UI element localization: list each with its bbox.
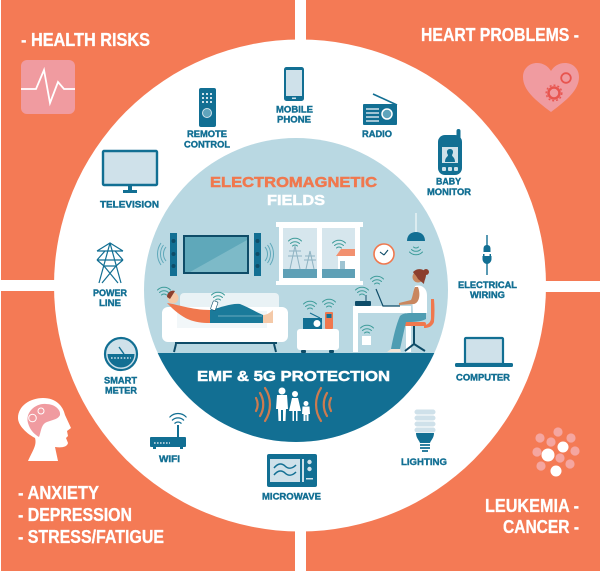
device: wifi router: WIFI	[159, 454, 180, 465]
title: electromagnetic fields	[210, 176, 377, 206]
device: electrical wiring plug: WIRING	[470, 290, 505, 301]
device: remote control: REMOTE	[187, 129, 227, 140]
panel: anxiety quadrant	[1, 291, 295, 571]
white device ring	[54, 40, 546, 532]
pendant lamp	[407, 213, 425, 255]
device: baby monitor	[427, 129, 471, 198]
device: microwave: MICROWAVE	[262, 492, 321, 502]
text: anxiety list: - DEPRESSION	[18, 504, 132, 525]
device: power line: LINE	[99, 298, 121, 309]
device: computer laptop: COMPUTER	[456, 372, 510, 384]
icon: family with signal waves	[256, 388, 331, 421]
device: microwave	[262, 454, 321, 502]
device: smart meter: METER	[105, 386, 137, 396]
device: mobile phone: PHONE	[277, 114, 311, 126]
panel: health risks quadrant	[1, 0, 295, 280]
seated woman on office chair	[387, 269, 434, 352]
device: radio	[362, 94, 397, 140]
device: electrical wiring plug	[458, 235, 517, 301]
text: leukemia and cancer: LEUKEMIA -	[485, 495, 579, 516]
device: radio: RADIO	[362, 129, 392, 140]
device: lighting bulb	[401, 412, 447, 468]
text: anxiety list: - STRESS/FATIGUE	[18, 526, 164, 547]
protection heading: EMF & 5G PROTECTION	[197, 368, 390, 385]
device: television	[100, 151, 159, 210]
text: leukemia and cancer: CANCER -	[503, 516, 579, 537]
text: leukemia and cancer	[485, 495, 579, 537]
device: lighting bulb: LIGHTING	[401, 457, 447, 468]
television with speakers	[157, 233, 274, 276]
heading: health risks: - HEALTH RISKS	[21, 29, 150, 50]
device: computer laptop	[455, 338, 513, 384]
icon: head with brain	[18, 398, 71, 461]
device: smart meter	[104, 338, 137, 396]
text: anxiety list	[18, 482, 164, 547]
device: wifi router	[150, 414, 186, 465]
device: power line: POWER	[93, 288, 127, 299]
device: baby monitor: BABY	[436, 176, 462, 188]
device: smart meter: SMART	[104, 376, 137, 386]
device: mobile phone	[276, 67, 313, 126]
icon: blood cells	[532, 427, 580, 476]
wall clock	[374, 244, 394, 264]
text: anxiety list: - ANXIETY	[18, 482, 100, 503]
icon: heartbeat pulse	[21, 60, 75, 114]
lying person with phone	[158, 287, 273, 323]
panel: leukemia quadrant	[306, 292, 600, 571]
panel: heart problems quadrant	[306, 0, 600, 281]
white sofa	[162, 293, 288, 352]
window with power lines and house	[276, 222, 363, 285]
device: baby monitor: MONITOR	[427, 187, 471, 198]
device: television: TELEVISION	[100, 200, 159, 210]
device: power line	[93, 243, 127, 309]
panel: central living room scene	[144, 138, 448, 442]
side table with radio and phone	[297, 299, 339, 353]
protection band	[158, 353, 434, 442]
device: remote control: CONTROL	[184, 140, 230, 150]
device: mobile phone: MOBILE	[276, 104, 313, 116]
title: electromagnetic fields: FIELDS	[267, 192, 325, 209]
device: remote control	[184, 88, 230, 150]
device: electrical wiring plug: ELECTRICAL	[458, 280, 517, 291]
icon: heart with gears	[523, 63, 579, 112]
desk with router and laptop	[353, 276, 411, 352]
title: electromagnetic fields: ELECTROMAGNETIC	[210, 174, 377, 191]
